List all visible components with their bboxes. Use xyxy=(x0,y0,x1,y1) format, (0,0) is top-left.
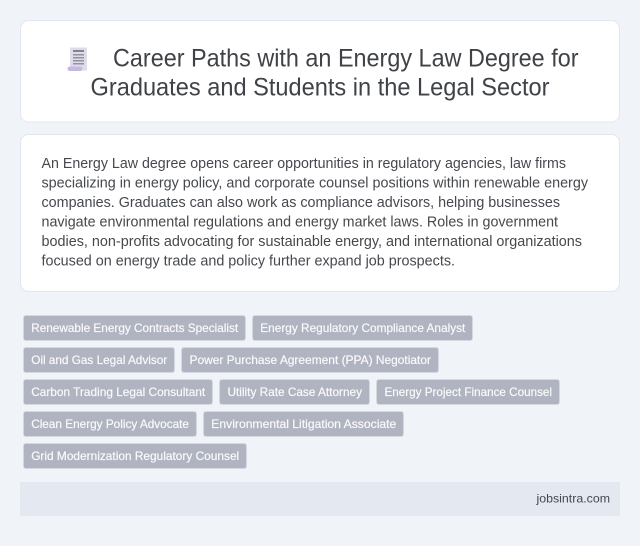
title xyxy=(90,45,578,102)
icon: legal document scroll xyxy=(68,48,87,71)
text block: description: navigate environmental regulations and energy market laws. Roles in government xyxy=(42,215,558,231)
text block: description: specializing in energy policy, and corporate counsel positions within renewable energy xyxy=(42,176,589,192)
tag: Utility Rate Case Attorney: Utility Rate Case Attorney xyxy=(228,385,362,399)
tag: Carbon Trading Legal Consultant: Carbon Trading Legal Consultant xyxy=(31,385,206,399)
tag list: career roles xyxy=(24,316,560,468)
tag: Oil and Gas Legal Advisor xyxy=(24,348,174,372)
tag: Clean Energy Policy Advocate xyxy=(24,412,196,436)
tag: Energy Regulatory Compliance Analyst xyxy=(252,316,472,340)
tag: Grid Modernization Regulatory Counsel xyxy=(24,444,246,468)
tag: Carbon Trading Legal Consultant xyxy=(24,380,212,404)
title: Graduates and Students in the Legal Sector xyxy=(90,74,550,102)
tag: Renewable Energy Contracts Specialist: Renewable Energy Contracts Specialist xyxy=(31,321,239,335)
tag: Grid Modernization Regulatory Counsel: Grid Modernization Regulatory Counsel xyxy=(31,449,239,463)
tag: Energy Regulatory Compliance Analyst: Energy Regulatory Compliance Analyst xyxy=(260,321,466,335)
tag: Renewable Energy Contracts Specialist xyxy=(24,316,246,340)
tag: Environmental Litigation Associate: Environmental Litigation Associate xyxy=(211,417,397,431)
text block: description: focused on energy trade and policy further expand job prospects. xyxy=(42,254,455,270)
tag: Clean Energy Policy Advocate: Clean Energy Policy Advocate xyxy=(31,417,189,431)
footer source label: jobsintra.com xyxy=(535,492,610,506)
text block: description: An Energy Law degree opens career opportunities in regulatory agencies, law firms xyxy=(42,156,566,172)
tag: Energy Project Finance Counsel: Energy Project Finance Counsel xyxy=(384,385,552,399)
text block: description xyxy=(42,156,589,270)
tag: Utility Rate Case Attorney xyxy=(220,380,370,404)
title: Career Paths with an Energy Law Degree for xyxy=(113,45,578,73)
footer bar xyxy=(20,482,620,516)
tag: Energy Project Finance Counsel xyxy=(376,380,560,404)
panel: description card xyxy=(20,134,620,292)
tag: Power Purchase Agreement (PPA) Negotiator: Power Purchase Agreement (PPA) Negotiator xyxy=(190,353,431,367)
tag: Power Purchase Agreement (PPA) Negotiator xyxy=(182,348,438,372)
text block: description: bodies, non-profits advocating for sustainable energy, and international organizations xyxy=(42,234,582,250)
tag: Environmental Litigation Associate xyxy=(204,412,404,436)
tag: Oil and Gas Legal Advisor: Oil and Gas Legal Advisor xyxy=(31,353,167,367)
text block: description: companies. Graduates can also work as compliance advisors, helping businesses xyxy=(42,195,560,211)
panel: header card xyxy=(20,20,620,122)
